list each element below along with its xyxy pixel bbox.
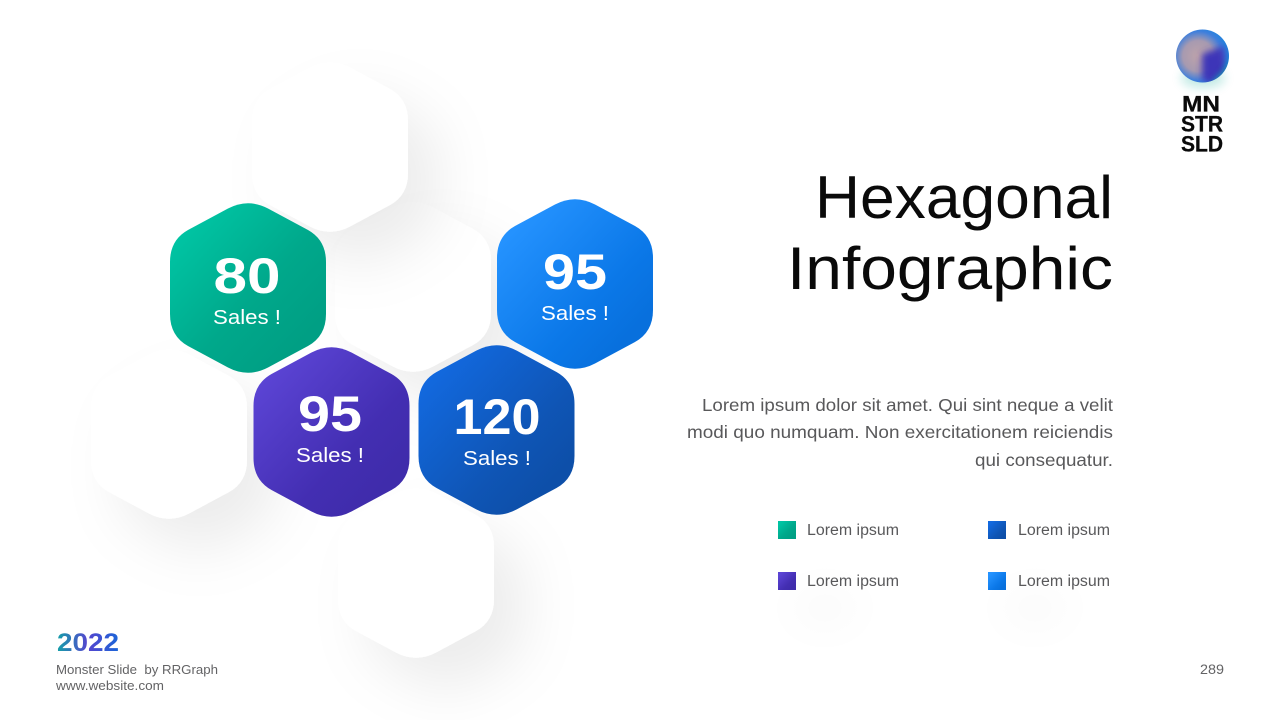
white hexagon: bottom: [338, 488, 494, 658]
hexagon: dark blue 120 sales: [418, 345, 574, 515]
legend item: purple: [778, 572, 899, 590]
legend item: green: Lorem ipsum: [807, 522, 899, 539]
legend: [778, 521, 1110, 590]
title: Hexagonal: [815, 164, 1113, 231]
logo wordmark: [1181, 92, 1223, 156]
legend item: blue: Lorem ipsum: [1018, 573, 1110, 590]
hexagon: dark blue 120 sales: 120: [454, 389, 540, 445]
legend shadows: [769, 562, 1091, 654]
body text: [687, 395, 1113, 470]
hexagon: purple 95 sales: [254, 347, 410, 517]
legend item: purple: Lorem ipsum: [807, 573, 899, 590]
hexagon: purple 95 sales: 95: [298, 386, 362, 442]
legend item: dark blue: Lorem ipsum: [1018, 522, 1110, 539]
hexagon: blue 95 sales: Sales !: [541, 303, 609, 325]
white hexagon: middle: [335, 202, 491, 372]
logo wordmark: SLD: [1181, 132, 1223, 156]
title: [787, 164, 1113, 302]
body text: modi quo numquam. Non exercitationem reiciendis: [687, 422, 1113, 442]
logo wordmark: STR: [1181, 112, 1223, 136]
hexagon: dark blue 120 sales: Sales !: [463, 448, 531, 470]
body text: qui consequatur.: [975, 450, 1113, 470]
hexagon: green 80 sales: Sales !: [213, 307, 281, 329]
title: Infographic: [787, 235, 1113, 302]
footer credit: [55, 663, 218, 693]
legend item: green: [778, 521, 899, 539]
body text: Lorem ipsum dolor sit amet. Qui sint neque a velit: [702, 395, 1113, 415]
legend item: blue: [988, 572, 1110, 590]
hexagon: green 80 sales: 80: [214, 248, 280, 304]
legend item: dark blue: [988, 521, 1110, 539]
logo wordmark: MN: [1182, 92, 1220, 116]
hexagon: blue 95 sales: 95: [543, 244, 607, 300]
white hexagon: top: [252, 62, 408, 232]
logo sphere: [1176, 30, 1232, 88]
year: 2022: [57, 629, 119, 657]
page number: 289: [1200, 661, 1224, 677]
hexagon: green 80 sales: [170, 203, 326, 373]
footer credit: www.website.com: [55, 679, 164, 693]
hexagon: blue 95 sales: [497, 199, 653, 369]
hexagon: purple 95 sales: Sales !: [296, 445, 364, 467]
footer credit: Monster Slide by RRGraph: [56, 663, 218, 677]
white hexagon: left: [91, 349, 247, 519]
